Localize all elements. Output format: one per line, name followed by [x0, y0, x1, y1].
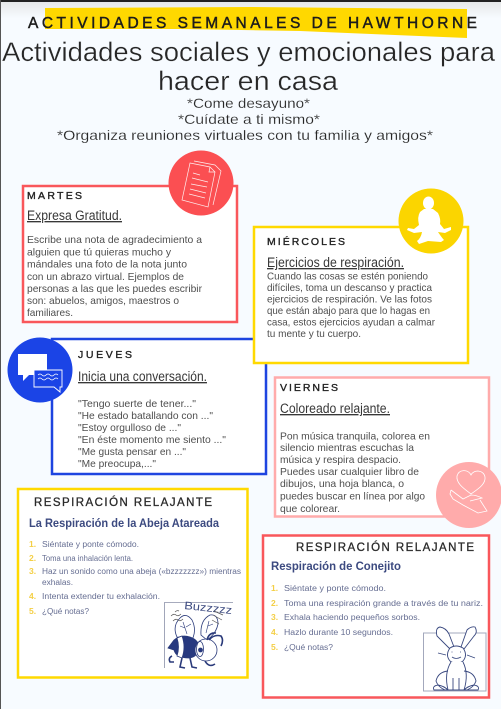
- martes text: [27, 235, 203, 319]
- miercoles text: que están abajo para que lo hagas en: [267, 306, 430, 317]
- reminders: *Come desayuno*: [187, 95, 311, 111]
- bee heading: RESPIRACIÓN RELAJANTE: [34, 496, 212, 509]
- title: Actividades sociales y emocionales para: [2, 37, 496, 67]
- viernes text: [280, 432, 430, 515]
- header banner: ACTIVIDADES SEMANALES DE HAWTHORNE: [28, 15, 477, 32]
- icon: document: [168, 150, 234, 216]
- bee steps: Intenta extender tu exhalación.: [42, 592, 160, 601]
- viernes text: Puedes usar cualquier libro de: [280, 467, 419, 478]
- rabbit steps: 1.: [271, 583, 278, 593]
- viernes heading: Coloreado relajante.: [280, 401, 390, 416]
- panel: bee breathing: [18, 489, 248, 678]
- panel: jueves: [8, 338, 266, 474]
- bee steps: Toma una inhalación lenta.: [42, 554, 133, 563]
- jueves phrases: "Tengo suerte de tener...": [78, 399, 196, 410]
- jueves heading: Inicia una conversación.: [78, 369, 207, 384]
- panel: viernes: [275, 378, 501, 528]
- martes text: familiares.: [27, 308, 73, 319]
- miercoles label: MIÉRCOLES: [267, 235, 345, 248]
- rabbit steps: 4.: [271, 627, 278, 637]
- header banner: [28, 7, 477, 38]
- rabbit steps: [271, 583, 483, 652]
- icon: heart in hand: [436, 462, 501, 528]
- reminders: *Organiza reuniones virtuales con tu familia y amigos*: [57, 127, 434, 143]
- rabbit subtitle: Respiración de Conejito: [271, 561, 401, 573]
- miercoles text: ejercicios de respiración. Ve las fotos: [267, 294, 432, 306]
- miercoles text: [267, 272, 436, 340]
- martes text: mándales una foto de la nota junto: [27, 260, 187, 270]
- jueves phrases: "Me preocupa,...": [78, 459, 156, 470]
- bee steps: 5.: [29, 606, 36, 616]
- title: hacer en casa: [158, 66, 339, 96]
- rabbit steps: Siéntate y ponte cómodo.: [284, 584, 386, 593]
- jueves phrases: "He estado batallando con ...": [78, 411, 213, 422]
- jueves phrases: "Estoy orgulloso de ...": [78, 423, 181, 434]
- title: [2, 37, 496, 96]
- martes text: Escribe una nota de agradecimiento a: [27, 235, 202, 246]
- bee subtitle: La Respiración de la Abeja Atareada: [29, 518, 220, 530]
- illustration: bee: Buzzzzz: [184, 600, 233, 617]
- viernes text: dibujos, una hoja blanca, o: [280, 479, 404, 490]
- rabbit steps: 5.: [271, 642, 278, 652]
- jueves phrases: "Me gusta pensar en ...": [78, 447, 186, 458]
- rabbit steps: Toma una respiración grande a través de tu nariz.: [284, 599, 483, 608]
- rabbit steps: ¿Qué notas?: [284, 643, 334, 652]
- martes text: son: abuelos, amigos, maestros o: [27, 296, 179, 307]
- bee steps: 4.: [29, 591, 36, 601]
- icon: meditation: [398, 188, 464, 254]
- miercoles text: casa, estos ejercicios ayudan a calmar: [267, 318, 436, 328]
- rabbit steps: Hazlo durante 10 segundos.: [284, 628, 393, 637]
- bee steps: Siéntate y ponte cómodo.: [42, 540, 139, 549]
- panel: rabbit breathing: [263, 536, 489, 698]
- jueves label: JUEVES: [78, 349, 132, 361]
- bee steps: 1.: [29, 539, 36, 549]
- martes text: personas a las que les puedes escribir: [27, 284, 203, 295]
- martes text: con un abrazo virtual. Ejemplos de: [27, 272, 184, 283]
- illustration: rabbit: [424, 627, 486, 691]
- viernes text: Pon música tranquila, colorea en: [280, 432, 430, 442]
- bee steps: exhalas.: [42, 578, 73, 587]
- bee steps: [29, 539, 241, 616]
- panel: martes: [23, 150, 237, 322]
- viernes text: puedes buscar en línea por algo: [280, 492, 425, 502]
- bee steps: Haz un sonido como una abeja («bzzzzzzz») mientras: [42, 567, 241, 576]
- illustration: bee: [164, 600, 233, 668]
- viernes label: VIERNES: [280, 382, 338, 394]
- miercoles heading: Ejercicios de respiración.: [267, 255, 404, 270]
- viernes text: silencio mientras escuchas la: [280, 443, 414, 454]
- martes heading: Expresa Gratitud.: [27, 208, 122, 223]
- rabbit steps: 3.: [271, 612, 278, 622]
- bee steps: 3.: [29, 566, 36, 576]
- rabbit steps: 2.: [271, 598, 278, 608]
- miercoles text: Cuando las cosas se estén poniendo: [267, 272, 428, 282]
- bee steps: ¿Qué notas?: [42, 607, 90, 616]
- miercoles text: difíciles, toma un descanso y practica: [267, 283, 432, 294]
- martes text: alguien que tú quieras mucho y: [27, 248, 172, 258]
- miercoles text: tu mente y tu cuerpo.: [267, 329, 361, 340]
- rabbit heading: RESPIRACIÓN RELAJANTE: [296, 541, 474, 554]
- icon: chat bubbles: [8, 338, 72, 402]
- jueves phrases: "En éste momento me siento ...": [78, 435, 226, 446]
- bee steps: 2.: [29, 553, 36, 563]
- panel: miercoles: [254, 188, 468, 363]
- reminders: *Cuídate a ti mismo*: [178, 111, 321, 127]
- jueves phrases: [78, 399, 226, 470]
- reminders: [57, 95, 434, 143]
- martes label: MARTES: [27, 190, 82, 202]
- viernes text: música y respira despacio.: [280, 455, 401, 466]
- viernes text: que colorear.: [280, 504, 340, 515]
- rabbit steps: Exhala haciendo pequeños sorbos.: [284, 613, 420, 622]
